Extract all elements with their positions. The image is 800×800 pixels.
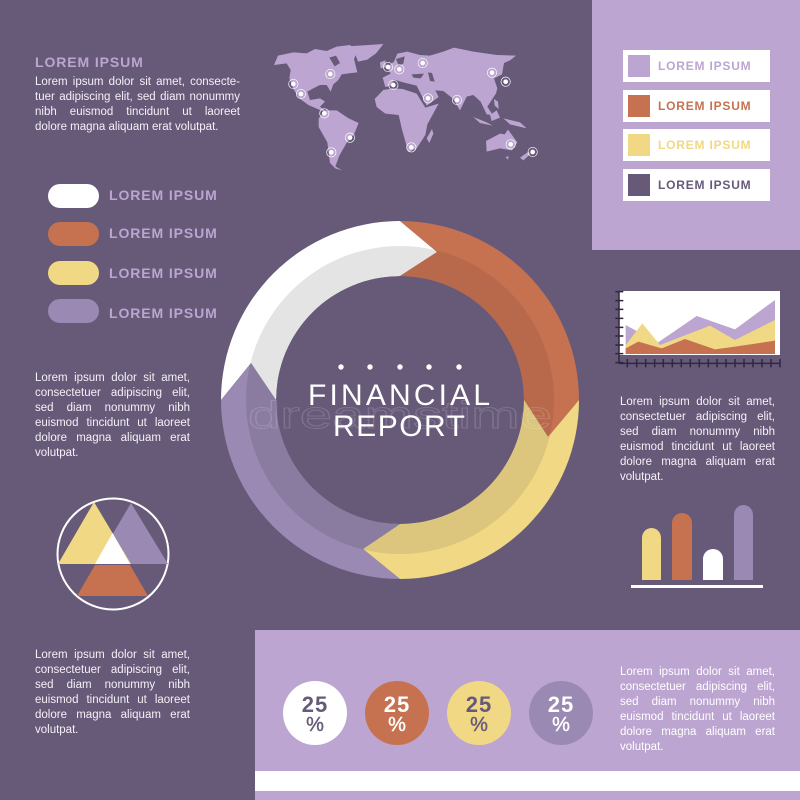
segment: yellow	[363, 400, 579, 579]
segment: purple	[221, 363, 400, 579]
watermark: dreamstime	[248, 395, 552, 437]
legend: top right	[623, 50, 770, 201]
title: report: REPORT	[333, 410, 465, 443]
text block: middle right: volutpat.	[620, 471, 663, 483]
text block: bottom left: sed diam nonummy nibh	[35, 679, 190, 691]
text block: top left: dolore magna aliquam erat volutpat.	[35, 121, 218, 133]
text block: bottom left	[35, 649, 190, 736]
segment: white	[221, 221, 437, 400]
text block: bottom left: volutpat.	[35, 724, 78, 736]
area chart	[615, 290, 781, 368]
text block: bottom right: consectetuer adipiscing elit,	[620, 681, 775, 693]
pill label 4: LOREM IPSUM	[109, 305, 218, 321]
text block: middle right: dolore magna aliquam erat	[620, 456, 775, 468]
center dots	[338, 364, 462, 370]
pill white	[48, 184, 99, 208]
panel: bottom band	[255, 630, 800, 800]
text block: middle right: Lorem ipsum dolor sit amet,	[620, 396, 775, 408]
circle yellow	[447, 681, 511, 745]
circle yellow: %	[470, 714, 488, 736]
map location markers	[289, 58, 537, 157]
pill label 3: LOREM IPSUM	[109, 265, 218, 281]
circle yellow: 25	[466, 692, 492, 717]
text block: bottom right	[620, 666, 775, 753]
text block: top left: tuer adipiscing elit, sed diam nonummy	[35, 91, 240, 103]
ring chart	[221, 221, 579, 579]
text block: top left: nibh euismod tincidunt ut laoreet	[35, 106, 240, 118]
world map	[274, 44, 538, 170]
circle purple: 25	[548, 692, 574, 717]
circle orange	[365, 681, 429, 745]
text block: bottom right: Lorem ipsum dolor sit amet,	[620, 666, 775, 678]
legend item 1	[623, 50, 770, 82]
text block: top left	[35, 76, 240, 133]
pill yellow	[48, 261, 99, 285]
legend item 3: LOREM IPSUM	[658, 138, 751, 152]
pill orange	[48, 222, 99, 246]
pill label 1: LOREM IPSUM	[109, 187, 218, 203]
circle white: 25	[302, 692, 328, 717]
text block: middle left: euismod tincidunt ut laoreet	[35, 417, 190, 429]
text block: middle left	[35, 372, 190, 459]
text block: bottom left: dolore magna aliquam erat	[35, 709, 190, 721]
text block: middle right: consectetuer adipiscing elit,	[620, 411, 775, 423]
legend item 1: LOREM IPSUM	[658, 59, 751, 73]
text block: bottom right: euismod tincidunt ut laoreet	[620, 711, 775, 723]
circle purple	[529, 681, 593, 745]
text block: bottom left: consectetuer adipiscing elit,	[35, 664, 190, 676]
legend item 2: LOREM IPSUM	[658, 99, 751, 113]
legend item 4	[623, 169, 770, 201]
legend item 4: LOREM IPSUM	[658, 178, 751, 192]
text block: middle left: volutpat.	[35, 447, 78, 459]
pill purple	[48, 299, 99, 323]
text block: bottom left: euismod tincidunt ut laoreet	[35, 694, 190, 706]
text block: bottom right: volutpat.	[620, 741, 663, 753]
legend item 2	[623, 90, 770, 122]
text block: top left: Lorem ipsum dolor sit amet, consecte-	[35, 76, 240, 88]
heading: top left: LOREM IPSUM	[35, 54, 144, 70]
text block: middle left: Lorem ipsum dolor sit amet,	[35, 372, 190, 384]
circle orange: %	[388, 714, 406, 736]
text block: bottom right: dolore magna aliquam erat	[620, 726, 775, 738]
pill label 2: LOREM IPSUM	[109, 225, 218, 241]
circle white	[283, 681, 347, 745]
text block: middle left: sed diam nonummy nibh	[35, 402, 190, 414]
segment: orange	[400, 221, 579, 437]
circle purple: %	[552, 714, 570, 736]
percent circles	[283, 681, 593, 745]
triangle venn icon	[56, 498, 170, 610]
text block: middle right: euismod tincidunt ut laoreet	[620, 441, 775, 453]
circle white: %	[306, 714, 324, 736]
text block: middle left: dolore magna aliquam erat	[35, 432, 190, 444]
text block: middle right: sed diam nonummy nibh	[620, 426, 775, 438]
text block: middle right	[620, 396, 775, 483]
circle orange: 25	[384, 692, 410, 717]
legend item 3	[623, 129, 770, 161]
white strip	[255, 771, 800, 791]
title: financial: FINANCIAL	[308, 379, 490, 412]
panel: legend background	[592, 0, 800, 250]
text block: bottom left: Lorem ipsum dolor sit amet,	[35, 649, 190, 661]
text block: bottom right: sed diam nonummy nibh	[620, 696, 775, 708]
pill legend: left	[48, 184, 218, 323]
bar chart	[631, 505, 763, 588]
text block: middle left: consectetuer adipiscing elit,	[35, 387, 190, 399]
